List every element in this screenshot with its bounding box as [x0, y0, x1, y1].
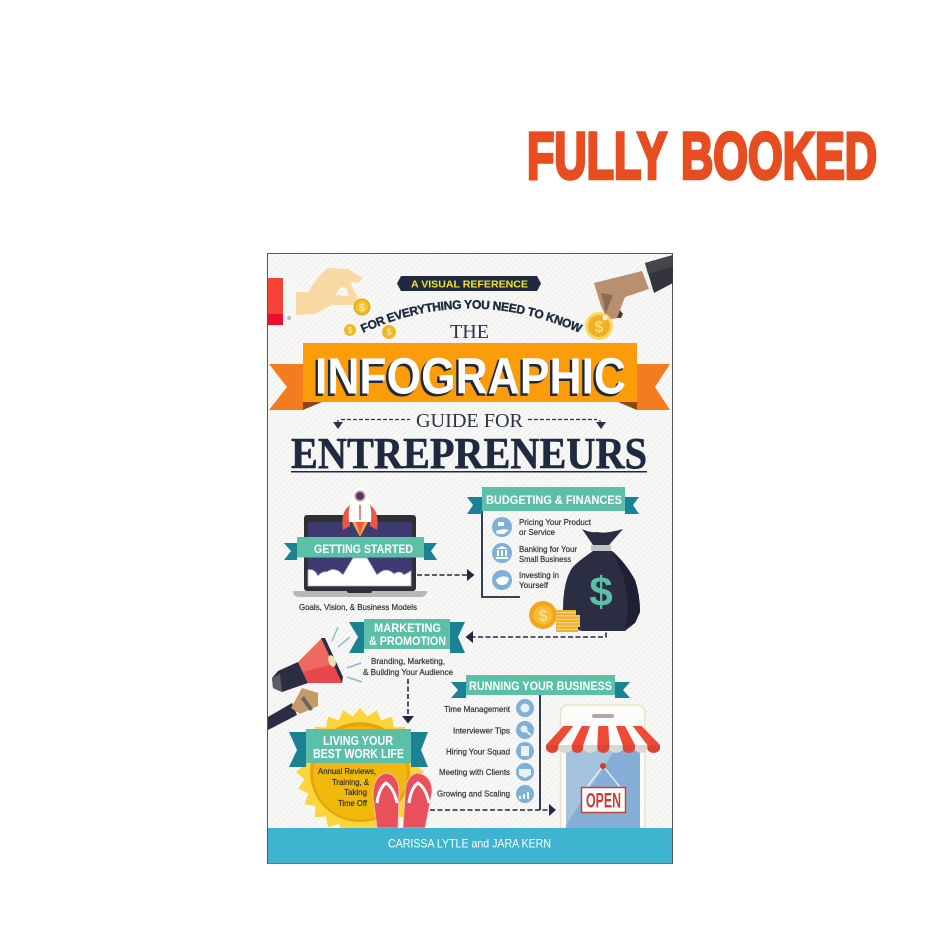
icon: right hand with coin [585, 255, 673, 340]
title: Infographic: INFOGRAPHIC [313, 350, 624, 406]
text: running list: Growing and Scaling [437, 788, 510, 798]
text: running list: Time Management [444, 704, 511, 714]
arrow: living to storefront [430, 804, 556, 816]
icon: megaphone with hand [268, 627, 362, 730]
banner: running [451, 675, 630, 698]
title: The: THE [450, 321, 489, 343]
curved tagline: FOR EVERYTHING YOU NEED TO KNOW [360, 300, 584, 333]
text: budgeting list: Banking for Your [519, 544, 577, 554]
badge: A Visual Reference: A VISUAL REFERENCE [411, 278, 528, 290]
panel: running your business [437, 675, 660, 828]
logo: Fully Booked: FULLY [527, 118, 667, 192]
text: running list: Meeting with Clients [439, 767, 510, 777]
icon: left hand with coin [268, 268, 396, 339]
banner: living: BEST WORK LIFE [313, 747, 404, 761]
text: running list: Interviewer Tips [453, 726, 510, 736]
icon: coins [529, 601, 580, 632]
subtitle: Guide for with dashed arrows [333, 410, 606, 432]
icon: sun [296, 708, 424, 836]
logo: Fully Booked [527, 118, 877, 192]
panel: budgeting and finances [467, 487, 640, 632]
icons: budgeting list [492, 517, 512, 590]
book cover [267, 253, 673, 864]
caption: branding: & Building Your Audience [363, 667, 453, 677]
text: budgeting list: Yourself [519, 580, 549, 590]
arrow: getting started to budgeting [417, 569, 474, 581]
text: budgeting list: Pricing Your Product [519, 517, 592, 527]
caption: branding: Branding, Marketing, [371, 656, 445, 666]
caption: annual reviews: Taking [344, 787, 367, 797]
banner: getting started: GETTING STARTED [314, 542, 413, 556]
banner: living: LIVING YOUR [323, 734, 393, 748]
awning [546, 726, 660, 753]
vertical line [539, 695, 541, 810]
panel: marketing and promotion [268, 619, 465, 730]
icon: laptop with rocket [293, 485, 427, 597]
icon: money bag: $ [589, 568, 613, 615]
text: running list: Hiring Your Squad [446, 746, 510, 756]
arrow: budgeting to marketing [466, 625, 606, 643]
text: budgeting list: Small Business [519, 554, 571, 564]
caption: annual reviews: Time Off [338, 798, 368, 808]
text: budgeting list [519, 517, 592, 590]
banner: budgeting: BUDGETING & FINANCES [486, 493, 622, 507]
footer: authors: CARISSA LYTLE and JARA KERN [388, 836, 551, 850]
icon: left hand with coin: $ [359, 302, 365, 314]
text: budgeting list: or Service [519, 527, 555, 537]
caption: branding [363, 656, 453, 677]
text: budgeting list: Investing in [519, 570, 559, 580]
banner: budgeting [467, 487, 639, 514]
title: Entrepreneurs: ENTREPRENEURS [291, 429, 647, 478]
caption: goals: Goals, Vision, & Business Models [299, 602, 417, 612]
icon: money bag [563, 529, 640, 631]
icon: left hand with coin: $ [386, 327, 392, 337]
icons: running list [516, 699, 534, 803]
badge: A Visual Reference [397, 276, 541, 291]
icon: coins: $ [539, 608, 548, 625]
banner: marketing: & PROMOTION [369, 634, 446, 648]
open sign: OPEN [586, 788, 621, 812]
text: running list [437, 704, 511, 798]
footer: authors [268, 828, 672, 864]
caption: annual reviews [318, 766, 376, 808]
caption: annual reviews: Annual Reviews, [318, 766, 376, 776]
icon: storefront phone [546, 705, 660, 828]
subtitle: Guide for with dashed arrows: GUIDE FOR [416, 410, 523, 432]
icon: left hand with coin: $ [348, 326, 353, 335]
banner: running: RUNNING YOUR BUSINESS [469, 679, 612, 693]
orange title banner [269, 343, 670, 410]
banner: living [289, 729, 428, 767]
icon: right hand with coin: $ [595, 319, 604, 336]
bracket line [482, 510, 520, 597]
banner: marketing: MARKETING [374, 621, 441, 635]
title: Infographic: INFOGRAPHIC [315, 348, 626, 404]
caption: annual reviews: Training, & [332, 777, 369, 787]
panel: living your best work life [289, 708, 432, 836]
icon: flip flops [373, 773, 432, 828]
banner: marketing [349, 619, 465, 653]
arrow: marketing to living [402, 679, 414, 724]
banner: getting started [284, 537, 437, 560]
panel: getting started [284, 485, 437, 612]
